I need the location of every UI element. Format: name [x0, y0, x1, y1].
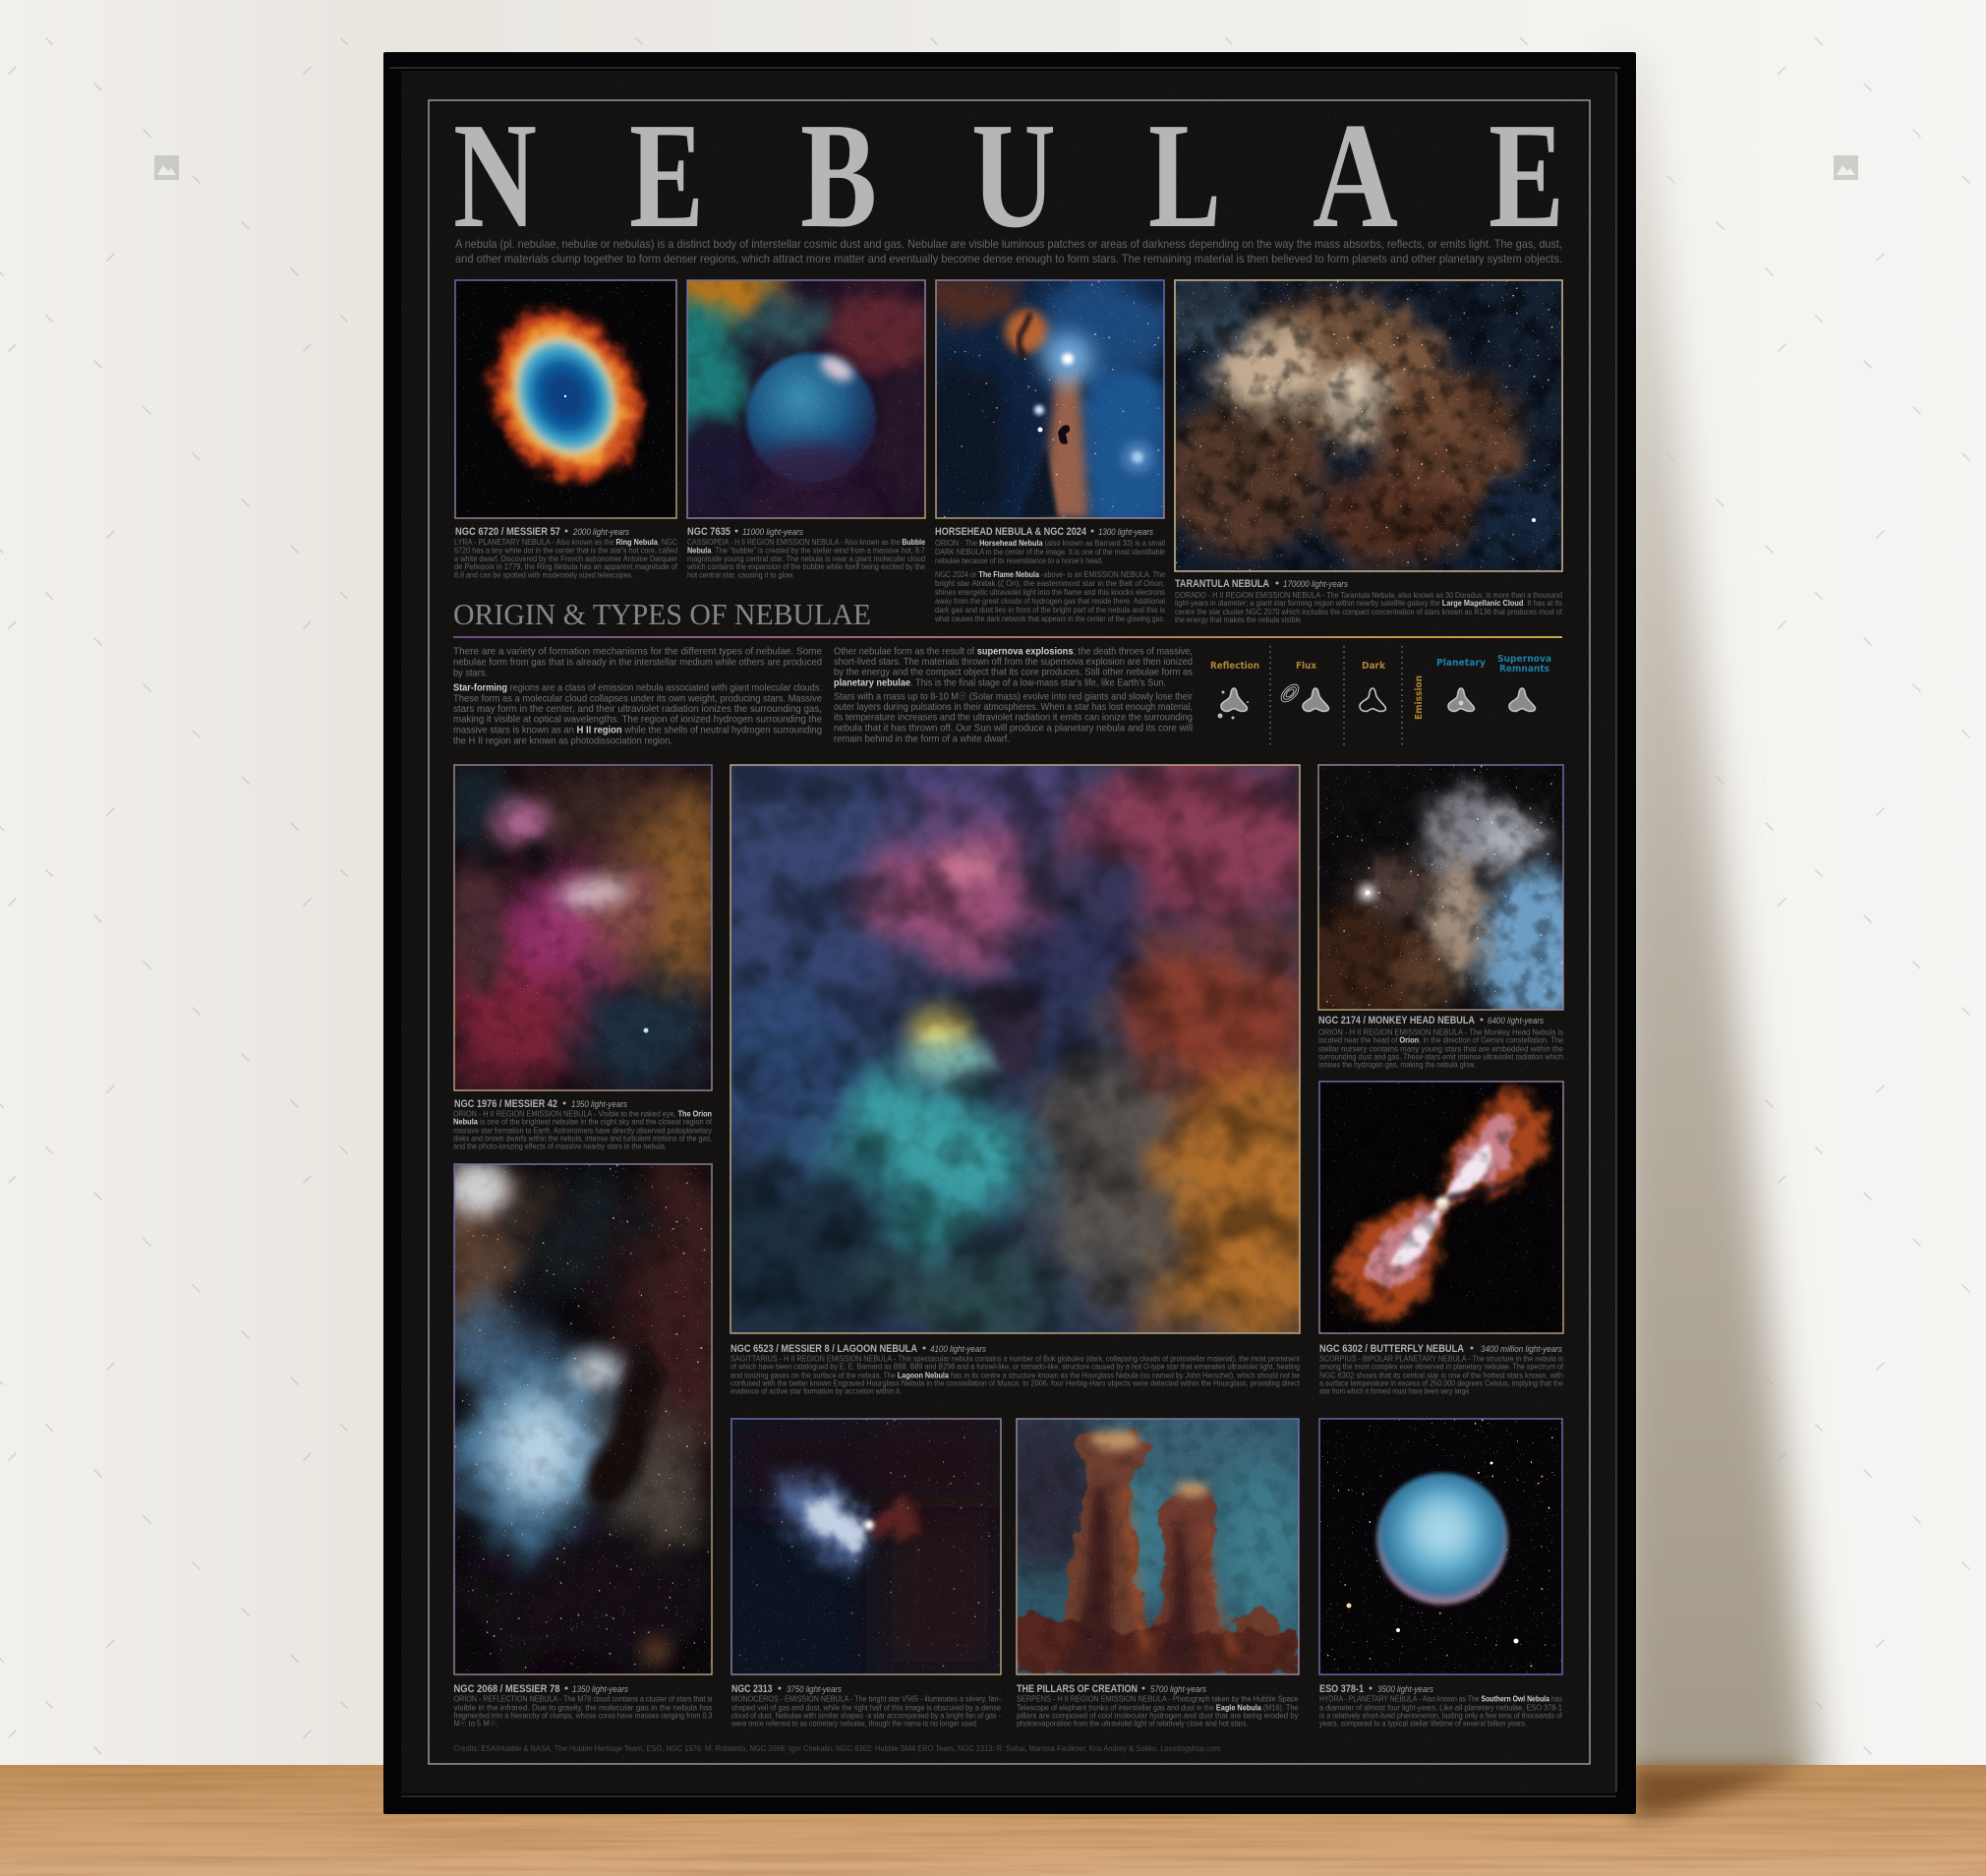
caption: NGC 2313: MONOCEROS - EMISSION NEBULA - The bright star V565 - illuminates a silvery, fan- [731, 1695, 1001, 1703]
caption: NGC 2313: NGC 2313 [731, 1683, 773, 1695]
text column: origin right: Other nebulae form as the result of supernova explosions; the death throes of massive, [834, 645, 1193, 657]
caption: ESO 378-1: ESO 378-1 [1319, 1683, 1364, 1695]
caption: NGC 7635: magnitude young central star. The nebula is near a giant molecular cloud [687, 555, 925, 563]
image: Bubble Nebula [653, 259, 948, 526]
caption: Tarantula: DORADO - H II REGION EMISSION NEBULA - The Tarantula Nebula, also known as 30 Doradus, is more than a thousand [1175, 591, 1562, 600]
legend: planetary [1436, 658, 1486, 711]
caption: NGC 1976: disks and brown dwarfs within the nebula, intense and turbulent motions of the gas, [453, 1135, 712, 1143]
caption: Lagoon: evidence of active star formation by accretion within it. [730, 1386, 902, 1396]
caption: NGC 1976: 1350 light-years [571, 1099, 627, 1110]
caption: Lagoon: 4100 light-years [930, 1344, 986, 1355]
image: Horsehead Nebula [902, 267, 1182, 536]
caption: Pillars: Telescope of elephant trunks of interstellar gas and dust in the Eagle Nebula (M16). The [1017, 1703, 1299, 1713]
caption: Butterfly: NGC 6302 shows that its central star is one of the hottest stars known, with [1319, 1371, 1563, 1380]
title: U [971, 92, 1056, 260]
caption: Pillars: SERPENS - H II REGION EMISSION NEBULA - Photograph taken by the Hubble Space [1017, 1695, 1299, 1703]
caption: NGC 7635: 11000 light-years [742, 527, 803, 538]
caption: NGC 1976: ORION - H II REGION EMISSION NEBULA - Visible to the naked eye, The Orion [453, 1109, 712, 1119]
poster frame [383, 52, 1636, 1814]
caption: NGC 2313: 3750 light-years [787, 1684, 842, 1695]
legend: flux [1278, 661, 1328, 711]
gradient rule [453, 636, 1562, 638]
caption: Horsehead: dark gas and dust lies in front of the bright part of the nebula and this is [935, 606, 1165, 615]
caption: Pillars: 5700 light-years [1150, 1684, 1206, 1695]
legend: supernova remnants: Supernova [1497, 654, 1551, 665]
text column: origin left: by stars. [453, 667, 488, 678]
intro text [455, 237, 1562, 265]
caption: NGC 6720: LYRA - PLANETARY NEBULA - Also known as the Ring Nebula, NGC [454, 538, 677, 547]
legend: reflection [1210, 661, 1259, 720]
legend: supernova remnants: Remnants [1499, 664, 1549, 674]
caption: NGC 7635: NGC 7635 [687, 526, 730, 538]
caption: Horsehead: shines energetic ultraviolet light into the flame and this knocks electrons [935, 588, 1165, 597]
caption: NGC 1976: Nebula is one of the brightest nebulae in the night sky and the closest region of [453, 1117, 713, 1127]
text column: origin left: stars may form in the center, and their ultraviolet radiation ionizes the surrounding gas, [453, 703, 822, 715]
caption: Pillars [1017, 1683, 1299, 1729]
caption: NGC 6720: 8.8 and can be spotted with moderately sized telescopes. [454, 570, 633, 580]
caption: Monkey Head: NGC 2174 / MONKEY HEAD NEBULA [1318, 1015, 1475, 1026]
caption: Butterfly: star from which it formed must have been very large. [1319, 1386, 1471, 1396]
caption: NGC 2313 [730, 1683, 1002, 1729]
text column: origin left [453, 645, 822, 747]
image: M78 [430, 1144, 739, 1674]
legend: planetary: Planetary [1436, 658, 1486, 669]
caption: Pillars: THE PILLARS OF CREATION [1017, 1683, 1138, 1695]
caption: Tarantula: the energy that makes the nebula visible. [1175, 616, 1303, 624]
caption: NGC 7635: which contains the expansion of the bubble while itself being excited by the [686, 562, 925, 571]
caption: Monkey Head [1318, 1015, 1564, 1070]
intro text: and other materials clump together to form denser regions, which attract more matter and eventually become dense enough to form stars. The remaining material is then believed to form planets and other planetary system objects. [455, 252, 1562, 265]
caption: NGC 7635: hot central star, causing it to glow. [687, 570, 794, 580]
image: NGC 2313 [731, 1419, 1001, 1674]
caption: NGC 6720: 6720 has a tiny white dot in the center that is the star's hot core, called [454, 547, 677, 555]
caption: Lagoon [730, 1343, 1301, 1396]
caption: Tarantula: 170000 light-years [1283, 579, 1348, 590]
legend: nebula types [1210, 646, 1551, 747]
caption: NGC 7635: CASSIOPEIA - H II REGION EMISSION NEBULA - Also known as the Bubble [687, 538, 925, 547]
text column: origin right: its temperature increases and the ultraviolet radiation it emits can ionize the surrounding [834, 712, 1193, 724]
caption: Monkey Head: ionises the hydrogen gas, making the nebula glow. [1318, 1060, 1476, 1070]
caption: Lagoon: of which have been catalogued by E. E. Barnard as B88, B89 and B296 and a funnel-like, or tornado-like, structure caused by a hot O-type star that emanates ultraviolet light, heating [730, 1363, 1300, 1371]
image: Tarantula Nebula [1150, 270, 1568, 575]
text column: origin left: massive stars is known as an H II region while the shells of neutral hydrogen surrounding [453, 724, 822, 735]
title: E [1489, 92, 1564, 260]
caption: ESO 378-1: is a relatively short-lived phenomenon, lasting only a few tens of thousands of [1319, 1711, 1563, 1721]
caption: Horsehead: bright star Alnitak (ζ Ori), the easternmost star in the Belt of Orion, [935, 579, 1165, 588]
section heading: ORIGIN & TYPES OF NEBULAE [453, 597, 871, 631]
caption: NGC 2068: fragmented into a hierarchy of clumps, whose cores have masses ranging from 0.3 [454, 1711, 713, 1721]
caption: Horsehead: 1300 light-years [1098, 527, 1153, 538]
caption: Tarantula: centre the star cluster NGC 2070 which includes the compact concentration of stars known as R136 that produces most of [1175, 608, 1563, 616]
caption: Monkey Head: located near the head of Orion, in the direction of Gemini constellation. The [1318, 1036, 1564, 1044]
caption: ESO 378-1: 3500 light-years [1377, 1684, 1433, 1695]
caption: NGC 2313: cloud of dust. Nebulae with similar shapes -a star accompanied by a bright fan of gas - [731, 1711, 1001, 1721]
credits: Credits: ESA/Hubble & NASA, The Hubble Heritage Team, ESO, NGC 1976: M. Robberto, NGC 2068: Igor Chekalin, NGC 6302: Hubble SM4 ERO Team, NGC 2313: R. Sahai, Marissa Faulkner, Kris Andrey & Sokko. Locodogshop.com [454, 1743, 1221, 1753]
caption: Butterfly: among the most complex ever observed in planetary nebulae. The spectrum of [1319, 1363, 1564, 1371]
text column: origin right: nebula that it has thrown off. Our Sun will produce a planetary nebula and its core will [834, 722, 1193, 733]
legend: dark [1360, 661, 1385, 711]
caption: Tarantula: TARANTULA NEBULA [1175, 578, 1269, 590]
title [453, 92, 1564, 260]
poster shadow on floor [1632, 1767, 1809, 1819]
text column: origin left: There are a variety of formation mechanisms for the different types of nebulae. Some [453, 645, 822, 657]
caption: Lagoon: and ionizing gases on the surface of the nebula. The Lagoon Nebula has in its centre a structure known as the Hourglass Nebula (so named by John Herschel), which should not be [730, 1371, 1300, 1380]
caption: NGC 1976: and the photo-ionizing effects of massive nearby stars in the nebula. [453, 1143, 667, 1150]
text column: origin left: Star-forming regions are a class of emission nebula associated with giant molecular clouds. [453, 682, 822, 694]
caption: Horsehead: DARK NEBULA in the center of the image. It is one of the most identifiable [935, 548, 1165, 557]
text column: origin left: These form as a molecular cloud collapses under its own weight, producing stars. Massive [453, 692, 822, 704]
text column: origin right: remain behind in the form of a white dwarf. [834, 733, 1010, 745]
image: Lagoon Nebula [672, 726, 1350, 1355]
caption: NGC 6720: NGC 6720 / MESSIER 57 [455, 526, 560, 538]
caption: Horsehead: nebulae because of its resemblance to a horse's head. [935, 557, 1103, 565]
caption: NGC 2068 [454, 1683, 713, 1729]
caption: Horsehead: HORSEHEAD NEBULA & NGC 2024 [935, 526, 1087, 538]
title: N [453, 92, 537, 260]
caption: Pillars: pillars are composed of cool molecular hydrogen and dust that are being eroded by [1017, 1711, 1298, 1721]
caption: NGC 6720: a white dwarf. Discovered by the French astronomer Antoine Darquier [454, 555, 677, 563]
caption: Monkey Head: 6400 light-years [1488, 1016, 1544, 1026]
title: L [1148, 92, 1221, 260]
text column: origin left: the H II region are known as photodissociation region. [453, 735, 672, 747]
image: Monkey Head Nebula [1284, 765, 1604, 1035]
text column: origin right: by the energy and the compact object that its core produces. Still other nebulae form as [834, 667, 1193, 678]
poster shadow on wall [1612, 57, 1819, 1799]
text column: origin left: making it visible at optical wavelengths. The region of ionized hydrogen surrounding the [453, 714, 822, 726]
caption: Butterfly [1319, 1343, 1564, 1396]
title: A [1313, 92, 1398, 260]
caption: ESO 378-1 [1319, 1683, 1563, 1729]
caption: ESO 378-1: years, compared to a typical stellar lifetime of several billion years. [1319, 1719, 1527, 1729]
caption: NGC 7635: Nebula. The "bubble" is created by the stellar wind from a massive hot, 8.7 [687, 547, 925, 555]
caption: NGC 2068: visible in the infrared. Due to gravity, the molecular gas in the nebula has [454, 1703, 712, 1713]
text column: origin right: Stars with a mass up to 8-10 M☉ (Solar mass) evolve into red giants and slowly lose their [834, 690, 1193, 702]
text column: origin right: short-lived stars. The materials thrown off from the supernova explosion are then ionized [834, 656, 1193, 668]
caption: NGC 2068: ORION - REFLECTION NEBULA - The M78 cloud contains a cluster of stars that is [454, 1695, 712, 1703]
image: Pillars of Creation [977, 1399, 1312, 1674]
caption: Lagoon: confused with the better known Engraved Hourglass Nebula in the constellation of Musca. In 2006, four Herbig-Haro objects were detected within the Hourglass, providing direct [730, 1378, 1301, 1388]
caption: NGC 2313: were once referred to as cometary nebulae, though the name is no longer used. [730, 1719, 978, 1729]
caption: ESO 378-1: HYDRA - PLANETARY NEBULA - Also known as The Southern Owl Nebula has [1319, 1695, 1562, 1703]
image: Orion Nebula [444, 755, 730, 1090]
wooden floor [0, 1765, 1986, 1876]
caption: Pillars: photoevaporation from the ultraviolet light of relatively close and hot stars. [1017, 1719, 1249, 1729]
caption: NGC 7635 [686, 526, 925, 580]
caption: Butterfly: NGC 6302 / BUTTERFLY NEBULA [1319, 1343, 1464, 1355]
text column: origin left: nebulae form from gas that is already in the interstellar medium while others are produced [453, 657, 822, 669]
image: Ring Nebula [455, 280, 676, 518]
caption: NGC 2068: M☉ to 5 M☉. [454, 1719, 497, 1729]
caption: NGC 1976 [453, 1098, 713, 1150]
legend: supernova remnants [1497, 654, 1551, 711]
title: B [800, 92, 877, 260]
watermark logo left [154, 155, 179, 180]
caption: NGC 2068: NGC 2068 / MESSIER 78 [454, 1683, 560, 1695]
caption: ESO 378-1: a diameter of almost four light-years. Like all planetary nebulae, ESO 378-1 [1319, 1703, 1563, 1713]
intro text: A nebula (pl. nebulae, nebulæ or nebulas) is a distinct body of interstellar cosmic dust and gas. Nebulae are visible luminous patches or areas of darkness depending on the way the mass absorbs, reflects, or emits light. The gas, dust, [455, 237, 1562, 251]
caption: Monkey Head: ORION - H II REGION EMISSION NEBULA - The Monkey Head Nebula is [1318, 1028, 1563, 1036]
caption: NGC 2313: shaped veil of gas and dust, while the right half of this image is obscured by a dense [731, 1703, 1002, 1713]
caption: Butterfly: a surface temperature in excess of 250,000 degrees Celsius, implying that the [1319, 1378, 1563, 1388]
caption: Horsehead: ORION - The Horsehead Nebula (also known as Barnard 33) is a small [935, 539, 1165, 548]
caption: Horsehead: NGC 2024 or The Flame Nebula -above- is an EMISSION NEBULA. The [935, 570, 1165, 579]
caption: NGC 2068: 1350 light-years [572, 1684, 628, 1695]
caption: Lagoon: SAGITTARIUS - H II REGION EMISSION NEBULA - This spectacular nebula contains a number of Bok globules (dark, collapsing clouds of protostellar material), the most prominent [730, 1355, 1301, 1363]
text column: origin right: planetary nebulae. This is the final stage of a low-mass star's life, like Earth's Sun. [834, 676, 1166, 688]
inner poster border [429, 100, 1590, 1764]
caption: NGC 1976: NGC 1976 / MESSIER 42 [454, 1098, 557, 1110]
caption: NGC 6720 [454, 526, 678, 580]
caption: Tarantula [1175, 578, 1563, 624]
text column: origin right [834, 645, 1193, 745]
caption: Tarantula: light-years in diameter; a giant star forming region within nearby satellite galaxy the Large Magellanic Cloud. It has at its [1175, 599, 1562, 608]
caption: Butterfly: SCORPIUS - BIPOLAR PLANETARY NEBULA - The structure in the nebula is [1319, 1355, 1563, 1363]
caption: Monkey Head: surrounding dust and gas. These stars emit intense ultraviolet radiation which [1318, 1052, 1563, 1062]
legend: flux: Flux [1296, 661, 1316, 672]
legend: reflection: Reflection [1210, 661, 1259, 672]
caption: Horsehead [934, 526, 1165, 623]
caption: Monkey Head: stellar nursery contains many young stars that are embedded within the [1318, 1044, 1564, 1054]
caption: NGC 6720: de Pellepoix in 1779, the Ring Nebula has an apparent magnitude of [454, 562, 678, 571]
caption: NGC 1976: massive star formation to Earth. Astronomers have directly observed protoplanetary [453, 1127, 712, 1135]
caption: Butterfly: 3400 million light-years [1481, 1344, 1562, 1355]
caption: Horsehead: what causes the dark network that appears in the center of the glowing gas. [934, 615, 1165, 623]
caption: Lagoon: NGC 6523 / MESSIER 8 / LAGOON NEBULA [730, 1343, 917, 1355]
image: Butterfly Nebula [1319, 1082, 1563, 1333]
watermark logo right [1834, 155, 1858, 180]
text column: origin right: outer layers during pulsations in their atmospheres. When a star has lost enough material, [834, 701, 1193, 713]
title: E [629, 92, 704, 260]
caption: NGC 6720: 2000 light-years [572, 527, 629, 538]
image: Southern Owl Nebula [1319, 1419, 1562, 1674]
legend: dark: Dark [1362, 661, 1385, 672]
caption: Horsehead: away from the great clouds of hydrogen gas that reside there. Additional [935, 597, 1165, 606]
legend: emission: Emission [1414, 675, 1425, 720]
